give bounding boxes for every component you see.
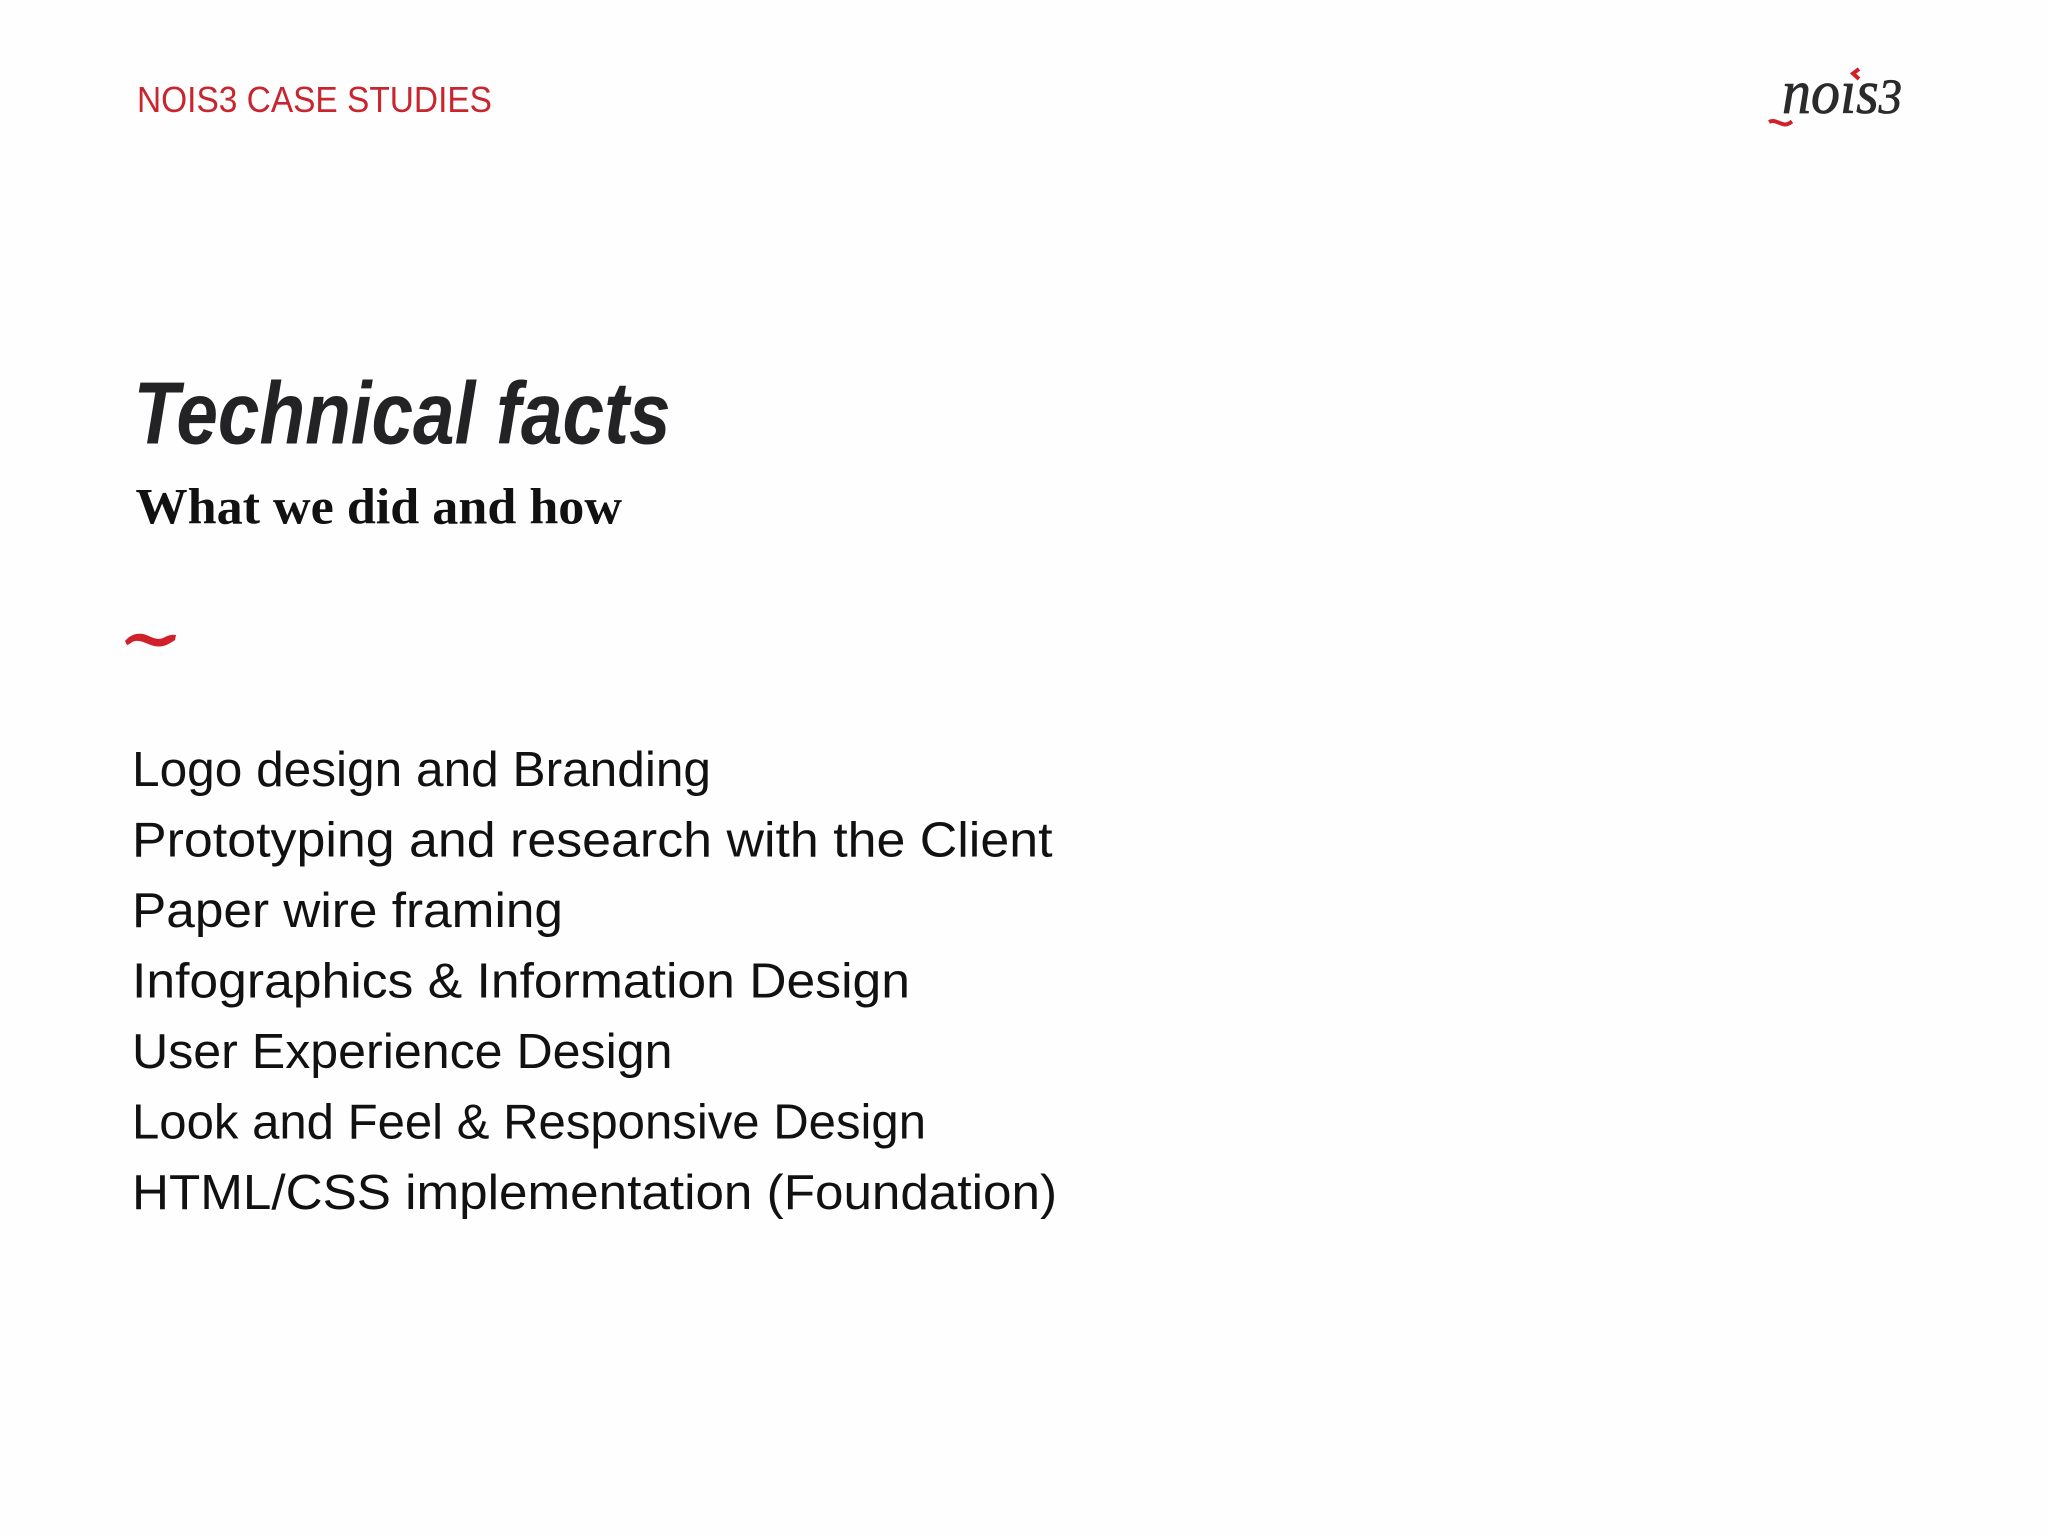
list of services: Logo design and Branding — [132, 742, 711, 797]
list of services: HTML/CSS implementation (Foundation) — [132, 1165, 1057, 1220]
list of services: Infographics & Information Design — [132, 954, 910, 1008]
list of services: User Experience Design — [132, 1024, 672, 1079]
icon: red tilde divider — [125, 634, 176, 647]
header label: NOIS3 CASE STUDIES — [137, 79, 492, 120]
title: Technical facts — [134, 364, 670, 462]
subtitle: What we did and how — [136, 480, 622, 536]
list of services: Paper wire framing — [132, 883, 563, 938]
list of services — [132, 742, 1057, 1220]
list of services: Prototyping and research with the Client — [132, 812, 1053, 868]
logo: nois3: nois3 — [1782, 59, 1902, 127]
list of services: Look and Feel & Responsive Design — [132, 1094, 926, 1150]
